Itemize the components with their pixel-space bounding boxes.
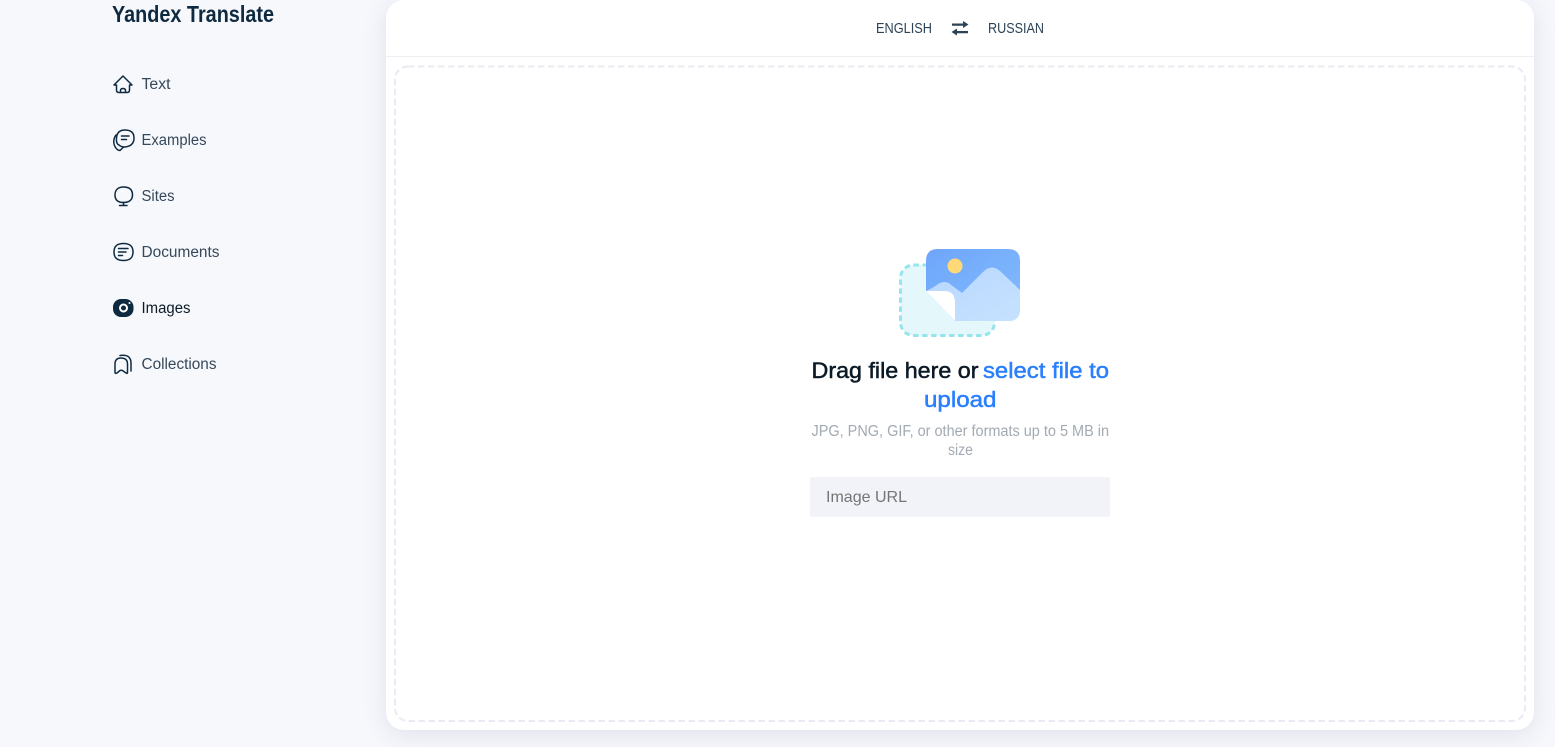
icon: image upload illustration	[900, 249, 1020, 336]
input: image URL	[810, 477, 1110, 517]
nav item: Collections	[115, 355, 217, 373]
icon: speech bubbles	[114, 130, 134, 150]
language switcher	[876, 21, 1044, 37]
nav item: Images (active): Images	[142, 300, 191, 317]
nav item: Documents: Documents	[142, 244, 220, 261]
text: accepted formats: size	[948, 442, 973, 459]
target language: RUSSIAN	[988, 21, 1044, 37]
heading: upload prompt: Drag file here or	[812, 358, 979, 383]
nav item: Images (active)	[113, 299, 191, 317]
icon: globe on stand	[115, 187, 132, 206]
heading: upload prompt	[812, 358, 1109, 412]
title: Yandex Translate: Yandex Translate	[112, 1, 274, 27]
icon: document bubble	[114, 244, 133, 260]
text: accepted formats: JPG, PNG, GIF, or other formats up to 5 MB in	[812, 423, 1109, 440]
nav item: Text	[114, 76, 171, 93]
nav item: Collections: Collections	[142, 356, 217, 373]
panel: main card	[386, 0, 1534, 730]
nav item: Sites	[115, 187, 175, 206]
icon: swap arrows	[952, 21, 968, 36]
nav item: Text: Text	[142, 76, 171, 93]
icon: bookmarks	[115, 355, 131, 373]
panel: dashed drop zone	[395, 66, 1525, 721]
source language: ENGLISH	[876, 21, 932, 37]
text: accepted formats	[812, 423, 1109, 459]
heading: upload prompt: select file to	[983, 358, 1109, 383]
icon: camera lens	[113, 299, 134, 317]
icon: house	[114, 76, 132, 92]
nav item: Sites: Sites	[142, 188, 175, 205]
nav item: Examples: Examples	[142, 132, 207, 149]
input: image URL: Image URL	[826, 489, 907, 506]
nav item: Examples	[114, 130, 207, 150]
heading: upload prompt: upload	[924, 387, 996, 412]
sidebar navigation	[113, 76, 220, 373]
